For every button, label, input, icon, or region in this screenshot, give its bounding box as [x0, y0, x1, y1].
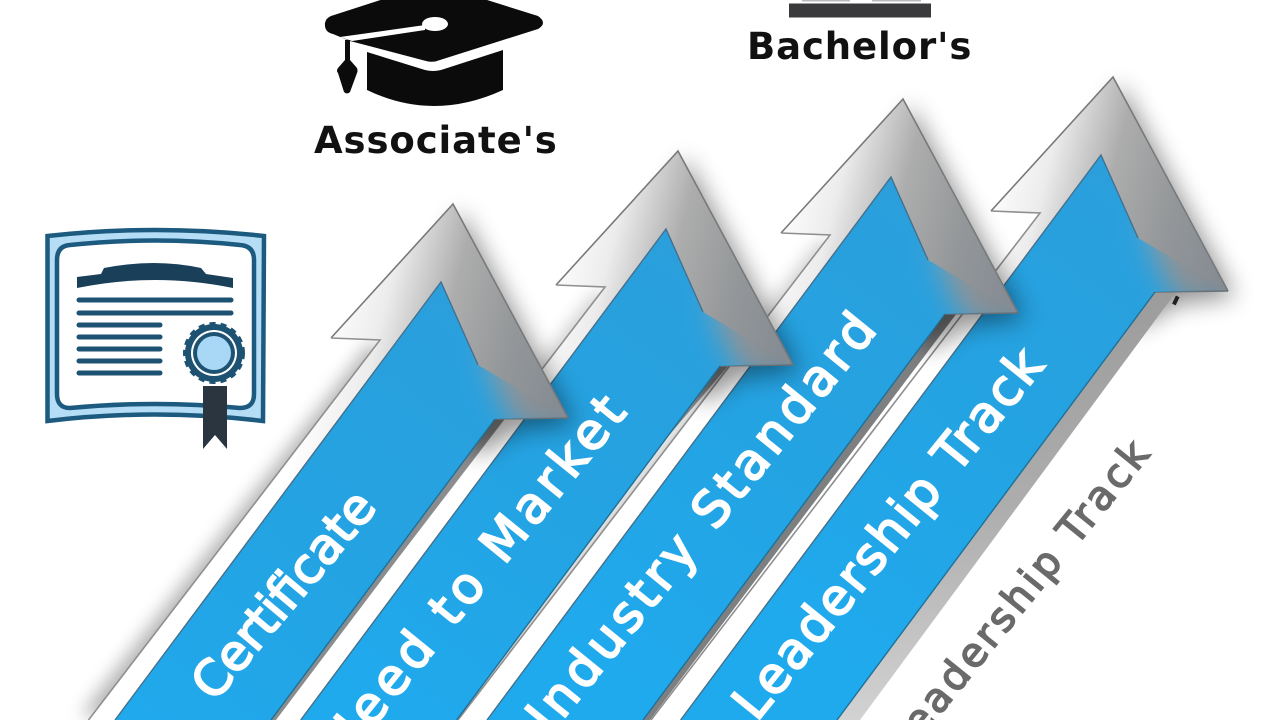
cap base [367, 50, 503, 106]
ribbon [203, 386, 227, 449]
arrow 1: Certificate [80, 204, 575, 720]
arrow 3 body [451, 99, 1025, 720]
upper slivers [802, 0, 850, 2]
arrow 2 side band [423, 365, 729, 720]
arrow 3 side band [642, 313, 957, 720]
certificate paper [57, 240, 254, 408]
seal [185, 324, 243, 382]
tassel [337, 40, 358, 94]
cap top board [325, 0, 543, 62]
certificate text lines [79, 300, 231, 373]
label: Bachelor's: Bachelor's [747, 25, 972, 68]
arrow label: Certificate: Certificate [180, 479, 387, 711]
small dark mark [1172, 296, 1180, 305]
arrow 3: Industry Standard [451, 99, 1025, 720]
arrow 2 body [266, 151, 800, 720]
label: Associate's: Associate's [314, 119, 558, 162]
arrow 4 body [651, 77, 1235, 720]
arrow 1 side band [271, 419, 503, 720]
base bar [789, 4, 931, 18]
cap slit and button [340, 17, 448, 41]
icon: graduation cap [325, 0, 543, 106]
arrow 1 body [80, 204, 575, 720]
certificate frame [48, 230, 264, 421]
icon: bachelor's base fragment [789, 0, 931, 18]
arrow 4: Leadership Track [651, 77, 1235, 720]
certificate banner [77, 263, 233, 288]
arrow label: Leadership Track: Leadership Track [721, 335, 1056, 720]
arrow 2: Need to Market [266, 151, 800, 720]
icon: certificate [48, 230, 264, 449]
